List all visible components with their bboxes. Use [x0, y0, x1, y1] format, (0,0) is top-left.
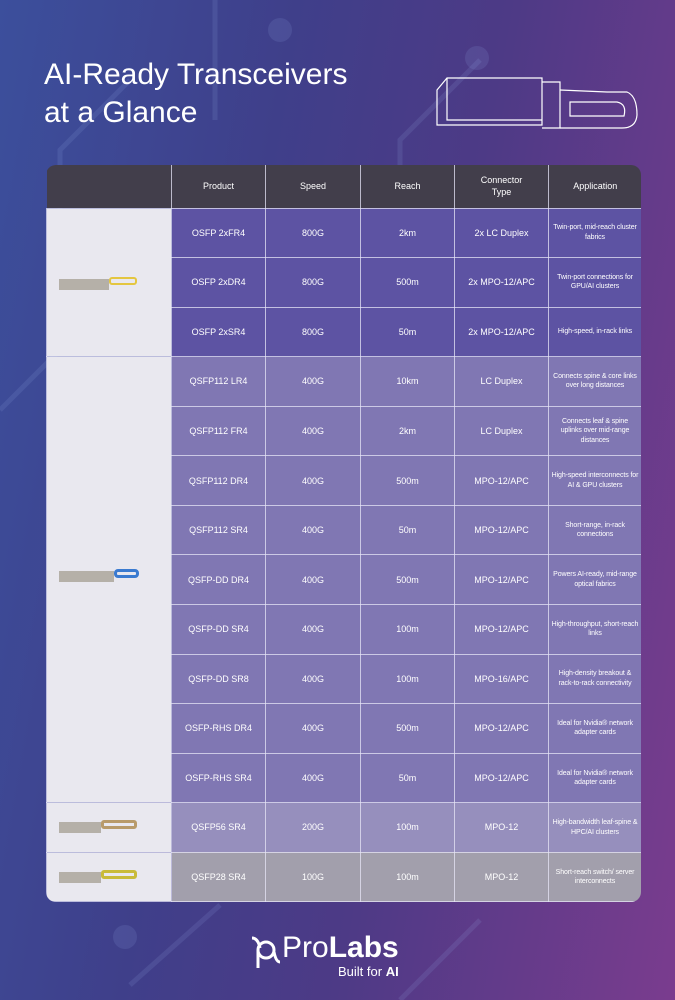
- header row: High-speed, in-rack links: [558, 328, 632, 335]
- header row: QSFP56 SR4: [191, 822, 246, 832]
- header row: Twin-port, mid-reach cluster fabrics: [553, 224, 637, 241]
- header row: Connector: [481, 175, 522, 185]
- header row: Speed: [300, 181, 326, 191]
- icon: transceiver outline: [436, 77, 638, 129]
- header row: QSFP112 FR4: [189, 426, 248, 436]
- header row: 200G: [302, 822, 324, 832]
- header row: 400G: [302, 525, 324, 535]
- header row: 100G: [302, 872, 324, 882]
- header row: 400G: [302, 773, 324, 783]
- header row: LC Duplex: [480, 426, 523, 436]
- logo: ProLabs: [282, 931, 399, 964]
- header row: OSFP 2xFR4: [192, 228, 245, 238]
- header row: 10km: [396, 376, 418, 386]
- header row: 800G: [302, 228, 324, 238]
- header row: Twin-port connections for GPU/AI clusters: [557, 274, 633, 290]
- header row: 500m: [396, 575, 419, 585]
- header row: 2x LC Duplex: [474, 228, 529, 238]
- header row: 2x MPO-12/APC: [468, 277, 535, 287]
- logo: Built for AI: [338, 964, 399, 979]
- header row: High-throughput, short-reach links: [552, 621, 638, 637]
- header row: 50m: [399, 525, 416, 535]
- header row: MPO-12/APC: [474, 525, 529, 535]
- header row: QSFP-DD DR4: [188, 575, 249, 585]
- header row: Ideal for Nvidia® network adapter cards: [557, 770, 633, 786]
- header row: 2km: [399, 228, 416, 238]
- header row: MPO-12/APC: [474, 723, 529, 733]
- header row: 100m: [396, 822, 419, 832]
- header row: 50m: [399, 327, 416, 337]
- header row: OSFP-RHS DR4: [185, 723, 252, 733]
- header row: 2km: [399, 426, 416, 436]
- header row: 400G: [302, 674, 324, 684]
- header row: 500m: [396, 723, 419, 733]
- header row: 100m: [396, 674, 419, 684]
- title: at a Glance: [44, 96, 197, 129]
- header row: 400G: [302, 476, 324, 486]
- header row: 50m: [399, 773, 416, 783]
- header row: Connects spine & core links over long distances: [553, 373, 637, 389]
- header row: MPO-12/APC: [474, 624, 529, 634]
- header row: QSFP-DD SR8: [188, 674, 249, 684]
- header row: MPO-12: [485, 872, 518, 882]
- table: [46, 165, 641, 902]
- header row: MPO-12/APC: [474, 575, 529, 585]
- header row: 400G: [302, 575, 324, 585]
- header row: 800G: [302, 277, 324, 287]
- header row: 400G: [302, 723, 324, 733]
- header row: OSFP 2xSR4: [192, 327, 245, 337]
- header row: High-speed interconnects for AI & GPU clusters: [552, 472, 638, 489]
- header row: MPO-16/APC: [474, 674, 529, 684]
- header row: Connects leaf & spine uplinks over mid-range distances: [561, 418, 629, 444]
- header row: 400G: [302, 426, 324, 436]
- header row: 500m: [396, 476, 419, 486]
- header row: Powers AI-ready, mid-range optical fabrics: [553, 571, 637, 588]
- header row: OSFP-RHS SR4: [185, 773, 252, 783]
- header row: LC Duplex: [480, 376, 523, 386]
- logo: [252, 931, 399, 979]
- header row: MPO-12/APC: [474, 476, 529, 486]
- header row: QSFP112 SR4: [189, 525, 248, 535]
- header row: 400G: [302, 376, 324, 386]
- header row: Application: [573, 181, 617, 191]
- icon: logo mark: [252, 936, 280, 968]
- header row: Short-range, in-rack connections: [565, 522, 625, 538]
- header row: MPO-12: [485, 822, 518, 832]
- header row: High-density breakout & rack-to-rack connectivity: [559, 670, 631, 687]
- header row: [47, 165, 641, 902]
- header row: High-bandwidth leaf-spine & HPC/AI clusters: [553, 819, 637, 836]
- header row: Short-reach switch/ server interconnects: [556, 869, 634, 885]
- title: AI-Ready Transceivers: [44, 58, 347, 91]
- header row: OSFP 2xDR4: [191, 277, 246, 287]
- header row: 500m: [396, 277, 419, 287]
- header row: 800G: [302, 327, 324, 337]
- header row: 400G: [302, 624, 324, 634]
- header row: 100m: [396, 872, 419, 882]
- header row: QSFP-DD SR4: [188, 624, 249, 634]
- header row: 100m: [396, 624, 419, 634]
- header row: Ideal for Nvidia® network adapter cards: [557, 720, 633, 736]
- header row: QSFP112 LR4: [190, 376, 247, 386]
- header row: QSFP112 DR4: [189, 476, 248, 486]
- header row: Reach: [394, 181, 420, 191]
- header row: QSFP28 SR4: [191, 872, 246, 882]
- title: [44, 58, 347, 129]
- header row: MPO-12/APC: [474, 773, 529, 783]
- header row: Type: [492, 187, 511, 197]
- header row: Product: [203, 181, 234, 191]
- header row: 2x MPO-12/APC: [468, 327, 535, 337]
